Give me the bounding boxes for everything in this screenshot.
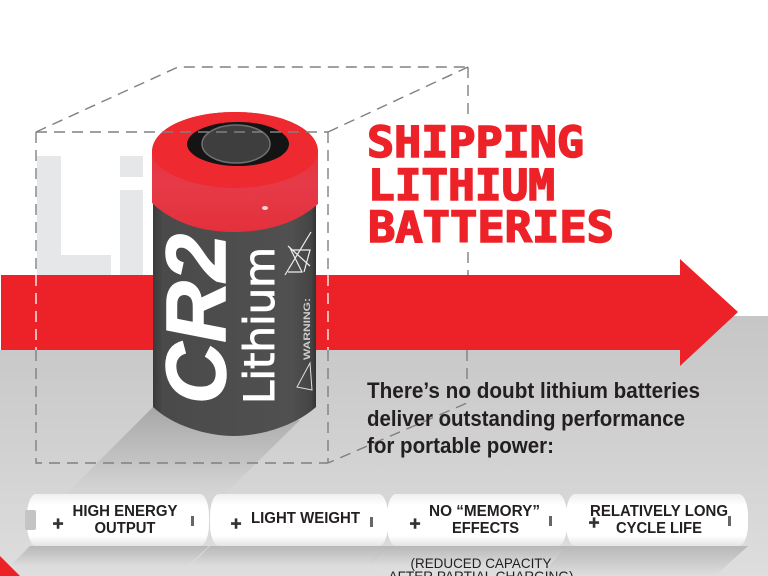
CR2 label: CR2 [149,234,243,404]
battery end cap [25,510,36,530]
title: LITHIUM [368,161,555,211]
plus sign: + [588,513,600,534]
minus sign [728,516,731,526]
icon: warning triangle [297,363,312,390]
lithium battery photo [149,112,318,436]
footnote: reduced capacity [388,555,574,576]
battery label: RELATIVELY LONG [590,503,728,520]
battery label: OUTPUT [94,520,156,537]
battery label: HIGH ENERGY [72,503,178,520]
dashed cube front edge over battery [36,131,328,133]
footnote: reduced capacity: (REDUCED CAPACITY [410,555,552,571]
red corner accent [0,556,20,576]
plus sign: + [409,514,421,535]
title: BATTERIES [368,203,614,253]
intro text: deliver outstanding performance [367,406,685,431]
battery label: CYCLE LIFE [616,520,702,537]
icon: crossed-out bin [285,232,311,275]
battery label: LIGHT WEIGHT [251,510,360,527]
battery: relatively long cycle life [566,494,748,546]
battery terminal recess [187,122,289,166]
cap top rim [152,112,318,188]
battery red cap [152,112,318,232]
title [367,118,614,253]
cap highlight [262,206,268,210]
minus sign [549,516,552,526]
battery shadows [10,546,748,576]
battery label [590,503,728,537]
battery label [72,503,178,537]
battery body [153,190,316,436]
intro text [367,378,700,458]
battery label: NO “MEMORY” [429,503,540,520]
WARNING label: WARNING: [302,298,312,360]
intro text: for portable power: [367,433,554,458]
plus sign: + [52,514,64,535]
battery: no memory effects [387,494,567,546]
plus sign: + [230,514,242,535]
gray background panel [0,316,768,576]
dashed cube outline [36,67,468,463]
battery terminal [202,125,270,163]
battery label: EFFECTS [452,520,519,537]
title: SHIPPING [367,118,584,168]
watermark: Li chemical symbol [37,156,143,275]
red arrow [1,259,738,366]
Lithium label: Lithium [235,247,284,404]
battery label [429,503,540,537]
battery: light weight [210,494,388,546]
minus sign [370,517,373,527]
minus sign [191,516,194,526]
battery: high energy output [25,494,209,546]
intro text: There’s no doubt lithium batteries [367,378,700,403]
battery cast shadow [63,407,300,497]
